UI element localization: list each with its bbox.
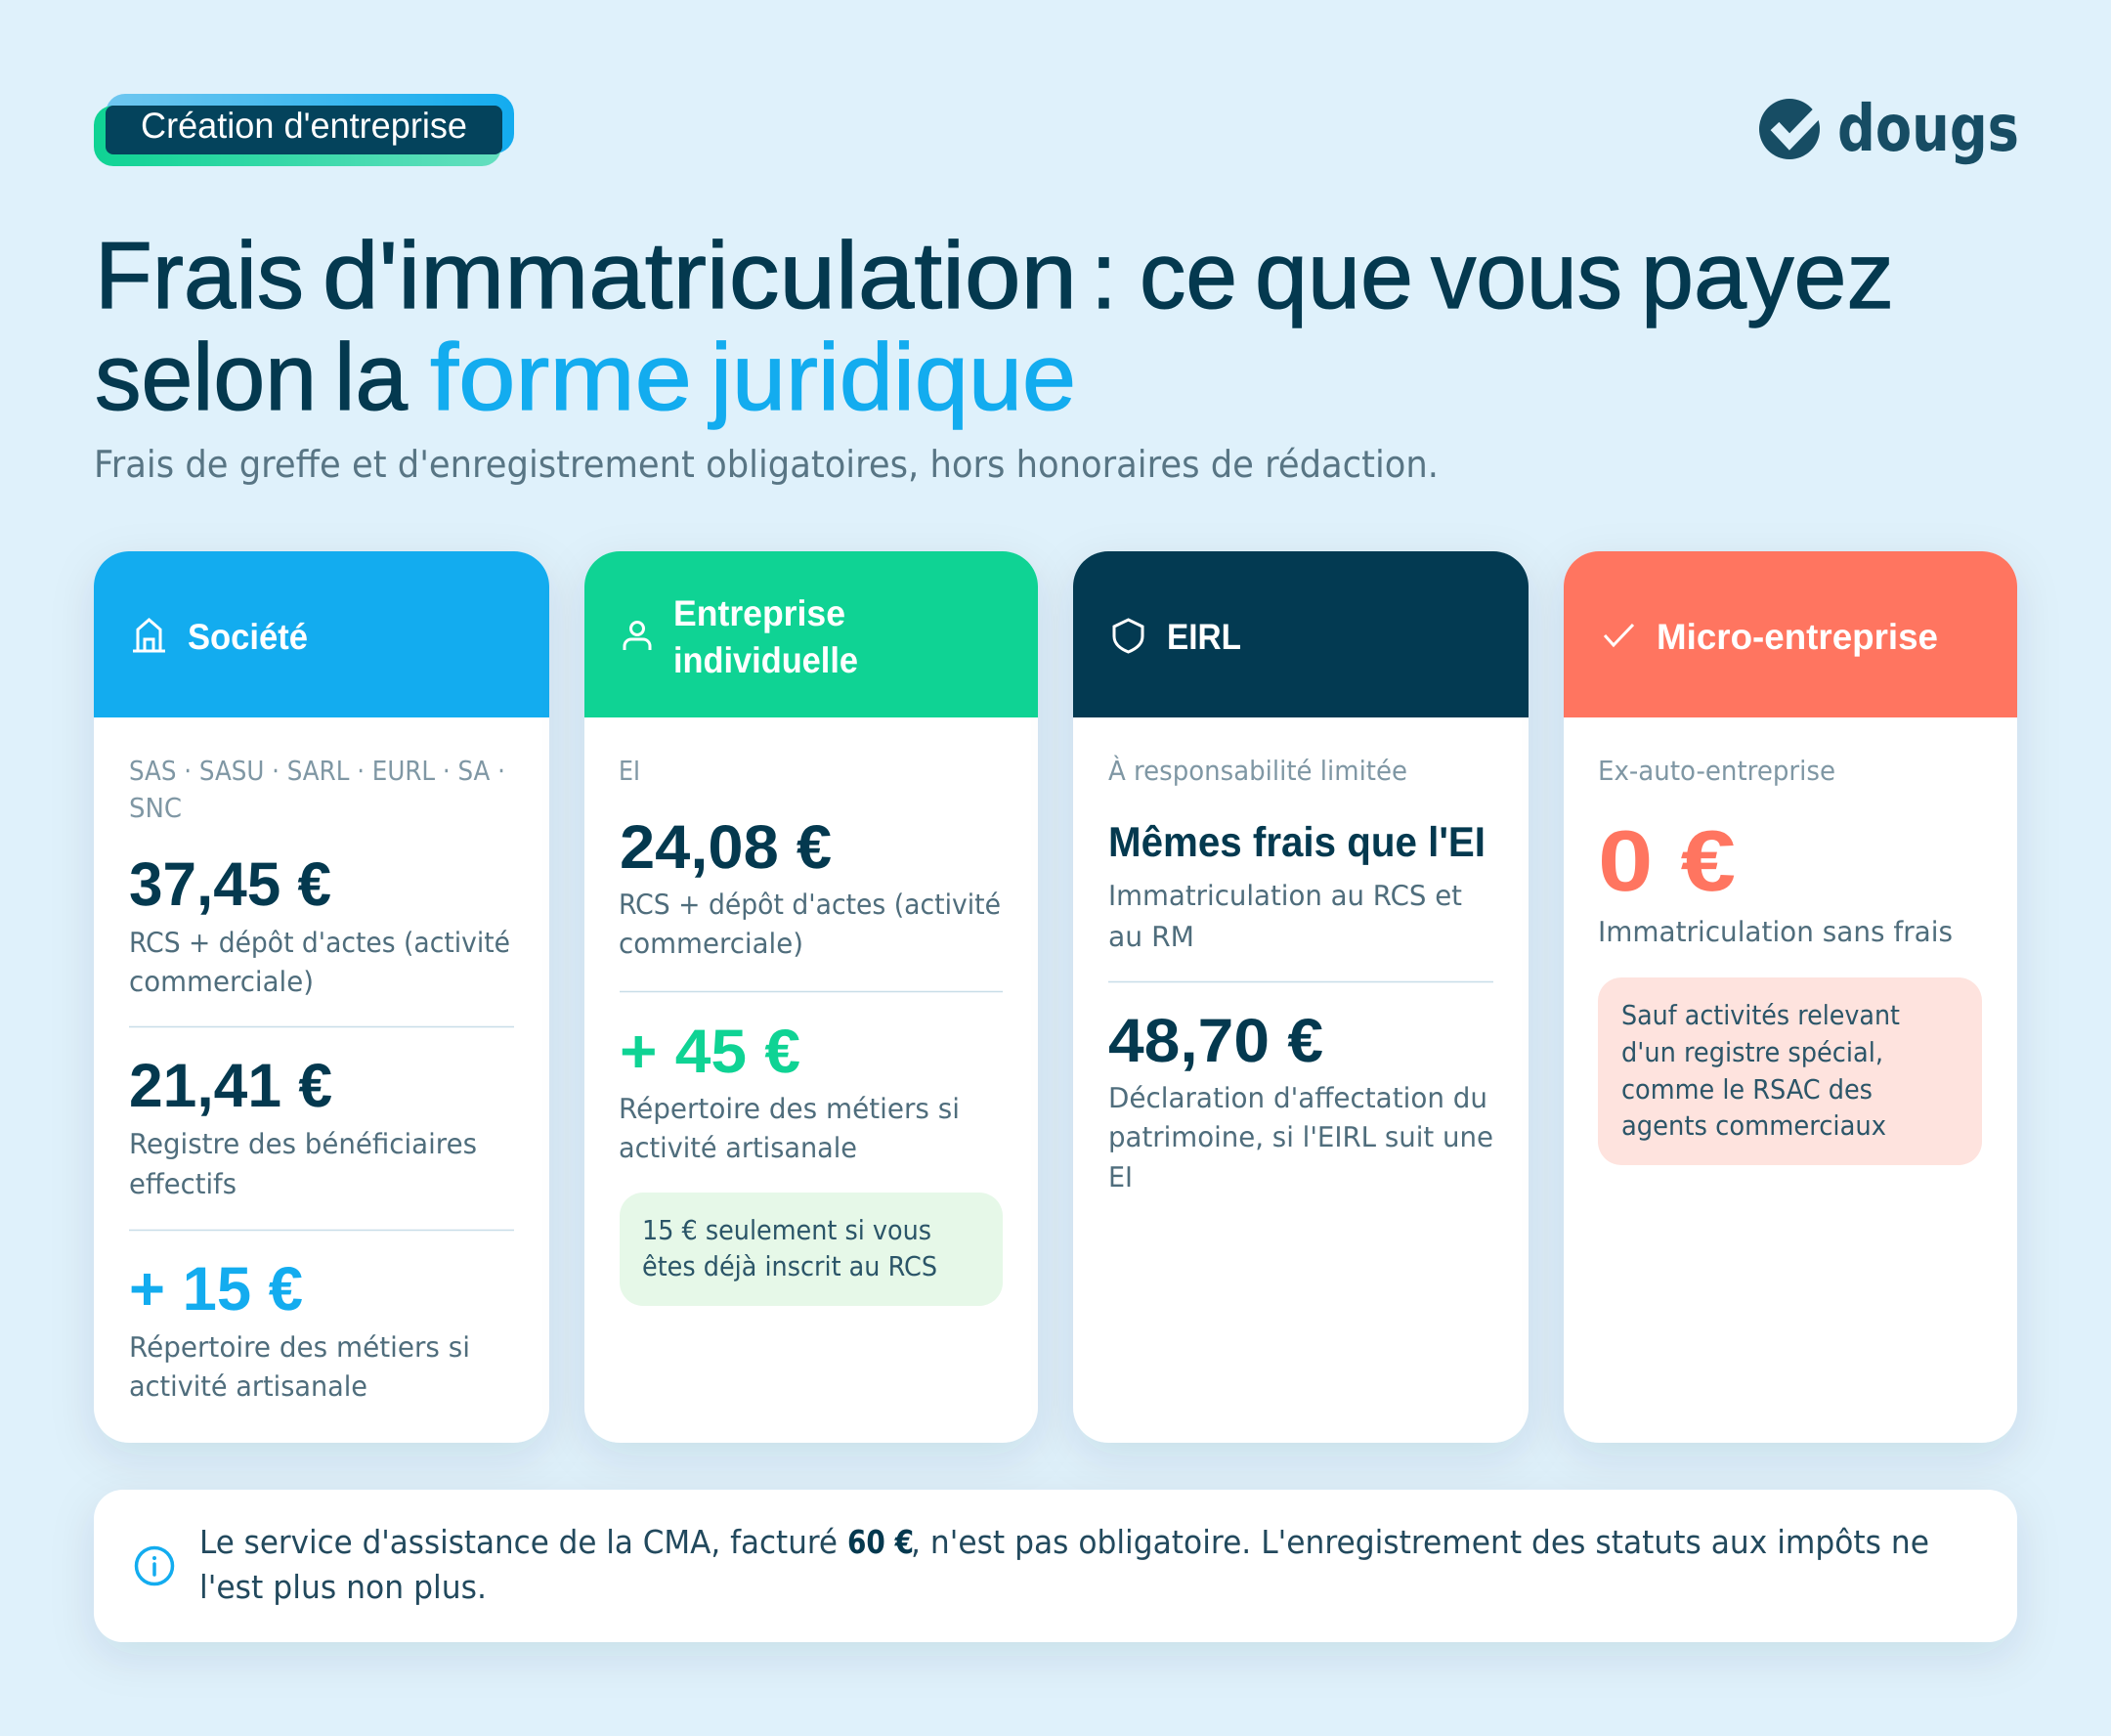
panel: EIRL	[1073, 551, 1529, 1443]
fee: 21,41 €	[129, 1052, 477, 1200]
fee: Mêmes frais que l'EI: Mêmes frais que l'EI	[1108, 819, 1486, 866]
fee: + 45 €: Répertoire des métiers si	[619, 1093, 960, 1125]
icon: building	[133, 620, 165, 651]
fee: 48,70 €: 48,70 €	[1108, 1007, 1323, 1075]
fee: 24,08 €: RCS + dépôt d'actes (activité	[619, 889, 1001, 921]
callout: coral: agents commerciaux	[1621, 1110, 1886, 1142]
fee: 0 €: 0 €	[1598, 812, 1736, 909]
title: forme	[430, 324, 692, 430]
form: À responsabilité limitée	[1108, 755, 1407, 787]
title: la	[334, 324, 408, 430]
fee: 0 €: Immatriculation sans frais	[1598, 916, 1953, 948]
fee: 21,41 €: 21,41 €	[129, 1052, 332, 1120]
callout: green: 15 € seulement si vous	[642, 1215, 931, 1246]
heading: EIRL: EIRL	[1167, 617, 1241, 657]
fee: 24,08 €: 24,08 €	[620, 813, 832, 882]
fee: 37,45 €: RCS + dépôt d'actes (activité	[129, 927, 510, 959]
form: EI	[619, 756, 640, 787]
heading: Entreprise individuelle	[673, 593, 858, 680]
title: ce	[1140, 222, 1237, 328]
fee: 21,41 €: Registre des bénéficiaires	[129, 1128, 477, 1160]
forms list: SNC	[129, 793, 182, 824]
icon: person	[625, 622, 650, 650]
title: selon	[95, 324, 317, 430]
fee: + 15 €	[129, 1255, 470, 1403]
form: Ex-auto-entreprise	[1598, 756, 1835, 787]
tag: Création d'entreprise	[94, 94, 514, 166]
callout: coral: d'un registre spécial,	[1621, 1037, 1883, 1068]
callout: green	[620, 1193, 1003, 1306]
title: payez	[1641, 222, 1894, 328]
note panel	[94, 1490, 2017, 1642]
fee: 0 €	[1598, 812, 1953, 948]
fee: + 45 €: + 45 €	[620, 1018, 800, 1086]
heading: Entreprise individuelle: individuelle	[673, 640, 858, 680]
fee: 37,45 €	[129, 850, 510, 998]
panel: Micro-entreprise	[1564, 551, 2017, 1443]
title: juridique	[708, 324, 1076, 430]
callout: green: êtes déjà inscrit au RCS	[642, 1251, 937, 1282]
callout: coral	[1598, 977, 1982, 1165]
icon: check	[1605, 625, 1633, 645]
icon: shield	[1114, 620, 1142, 652]
note text: 60 €	[847, 1523, 914, 1561]
fee: 21,41 €: effectifs	[129, 1168, 237, 1200]
note text: l'est plus non plus.	[199, 1568, 487, 1606]
title: que	[1255, 222, 1413, 328]
callout: coral: comme le RSAC des	[1621, 1074, 1873, 1106]
fee: 37,45 €: commerciale)	[129, 966, 314, 998]
fee: + 15 €: Répertoire des métiers si	[129, 1331, 470, 1364]
forms list	[129, 756, 505, 824]
fee: 48,70 €: EI	[1108, 1161, 1133, 1194]
title: vous	[1431, 222, 1622, 328]
title: d'immatriculation	[323, 222, 1077, 328]
fee: Mêmes frais que l'EI	[1108, 819, 1486, 953]
fee: 48,70 €: patrimoine, si l'EIRL suit une	[1108, 1121, 1493, 1153]
fee: + 45 €	[619, 1018, 960, 1164]
fee: Mêmes frais que l'EI: Immatriculation au RCS et	[1108, 880, 1462, 912]
header: Micro-entreprise	[1564, 551, 2017, 717]
callout: coral: Sauf activités relevant	[1621, 1000, 1900, 1031]
heading: Entreprise individuelle: Entreprise	[673, 593, 845, 633]
fee: + 45 €: activité artisanale	[619, 1132, 857, 1164]
title: Frais	[95, 222, 304, 328]
tag: Création d'entreprise: Création d'entreprise	[141, 106, 467, 146]
logo: dougs	[1759, 91, 2019, 166]
subtitle: Frais de greffe et d'enregistrement obligatoires, hors honoraires de rédaction.	[94, 443, 1439, 486]
fee: 24,08 €	[619, 813, 1001, 960]
panel: Entreprise individuelle	[584, 551, 1038, 1443]
fee: 48,70 €: Déclaration d'affectation du	[1108, 1082, 1487, 1114]
panel: Société	[94, 551, 549, 1443]
note text	[199, 1523, 1929, 1606]
fee: 48,70 €	[1108, 1007, 1493, 1194]
note text: Le service d'assistance de la CMA, facturé	[199, 1523, 838, 1561]
logo: dougs: dougs	[1837, 91, 2019, 166]
header: Entreprise individuelle	[584, 551, 1038, 717]
forms list: SAS · SASU · SARL · EURL · SA ·	[129, 756, 505, 787]
icon: info	[137, 1548, 172, 1584]
heading: Société: Société	[188, 617, 308, 657]
fee: + 15 €: activité artisanale	[129, 1370, 367, 1403]
fee: 37,45 €: 37,45 €	[129, 850, 331, 919]
fee: + 15 €: + 15 €	[129, 1255, 303, 1324]
header: EIRL	[1073, 551, 1529, 717]
fee: Mêmes frais que l'EI: au RM	[1108, 921, 1194, 953]
title: :	[1091, 222, 1117, 328]
heading: Micro-entreprise: Micro-entreprise	[1657, 617, 1938, 657]
title	[95, 222, 1894, 430]
note text: , n'est pas obligatoire. L'enregistrement des statuts aux impôts ne	[911, 1523, 1929, 1561]
fee: 24,08 €: commerciale)	[619, 928, 803, 960]
header: Société	[94, 551, 549, 717]
